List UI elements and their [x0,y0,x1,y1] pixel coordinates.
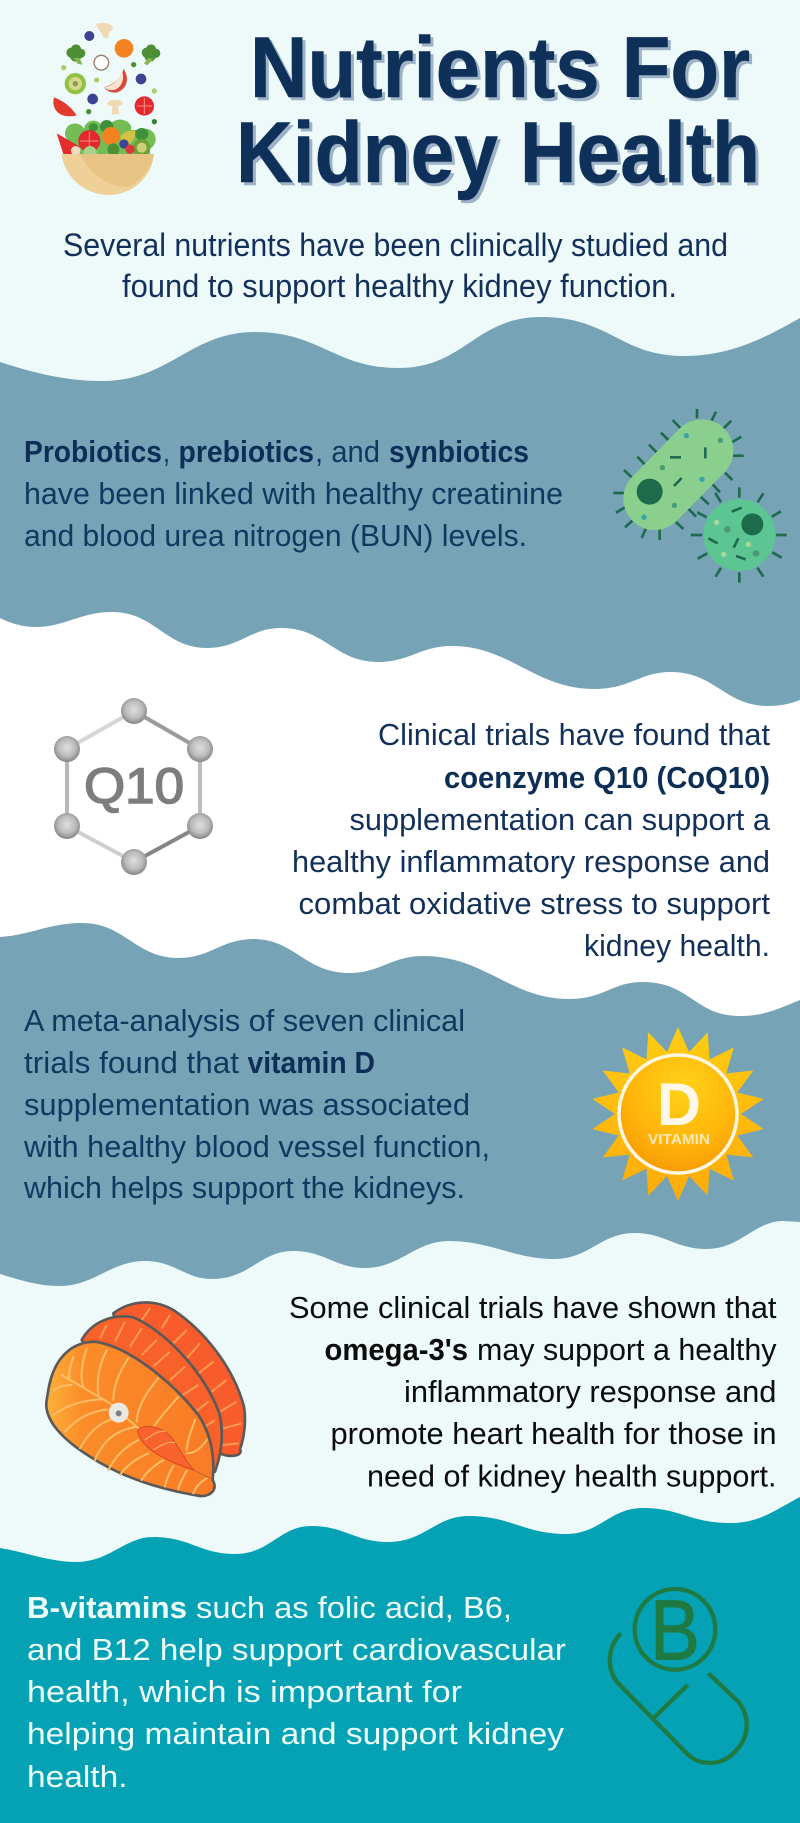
bonds [67,711,200,862]
middle slice [82,1316,222,1472]
icon: salad bowl with falling vegetables [53,23,160,195]
panel: omega-3 pale band [0,1221,800,1823]
broccoli right [142,44,160,65]
text block: vitamin D: A meta-analysis of seven clinical [24,1003,465,1038]
text block: B-vitamins: helping maintain and support kidney [27,1716,565,1751]
text block: omega-3: inflammatory response and [404,1374,776,1409]
mushroom top [96,23,113,38]
apple wedge [104,69,127,93]
atoms [54,698,213,875]
text block: probiotics [24,434,563,553]
Q10 label: Q10 [84,758,184,814]
text block: probiotics: Probiotics [24,434,162,469]
text block: B-vitamins: such as folic acid, B6, [196,1590,512,1625]
B circle [635,1589,715,1670]
text block: omega-3: Some clinical trials have shown that [289,1290,777,1325]
text block: probiotics: , and [315,434,380,469]
title shadow: Nutrients For [253,23,753,119]
text block: B-vitamins: and B12 help support cardiovascular [27,1632,566,1667]
text block: B-vitamins: B-vitamins [27,1590,187,1625]
text block: coenzyme Q10: Clinical trials have found that [378,717,770,752]
text block: probiotics: prebiotics [178,434,314,469]
panel: B-vitamins teal band [0,1497,800,1823]
icon: bacteria [613,409,787,583]
text block: coenzyme Q10: combat oxidative stress to support [298,886,770,921]
intro text [63,227,728,304]
sun rays [592,1027,764,1201]
text block: B-vitamins: health. [27,1759,128,1794]
letter D: D [657,1071,701,1138]
icon: vitamin D sun [592,1027,764,1201]
text block: probiotics: , [163,434,170,469]
text block: omega-3: promote heart health for those in [330,1416,776,1451]
text block: coenzyme Q10 [292,717,771,963]
text block: vitamin D: supplementation was associated [24,1087,470,1122]
back slice [113,1302,245,1456]
icon: vitamin B capsule [610,1583,747,1763]
tomato wedge [53,97,77,116]
icon: Q10 molecule [54,698,213,875]
title text: Kidney Health [236,105,760,201]
title text [236,20,760,201]
intro text: Several nutrients have been clinically studied and [63,227,728,263]
text block: B-vitamins: health, which is important for [27,1674,462,1709]
text block: omega-3: may support a healthy [477,1332,777,1367]
title shadow: Kidney Health [239,108,763,204]
text block: omega-3 [289,1290,777,1494]
backbone [109,1403,129,1423]
text block: omega-3: omega-3's [324,1332,468,1367]
text block: coenzyme Q10: supplementation can support a [350,802,771,837]
belly fin [137,1426,193,1470]
text block: vitamin D: trials found that [24,1045,239,1080]
text block: vitamin D: with healthy blood vessel function, [23,1129,490,1164]
text block: coenzyme Q10: healthy inflammatory response and [292,844,770,879]
text block: vitamin D: vitamin D [248,1045,375,1080]
intro text: found to support healthy kidney function. [122,268,677,304]
title [236,20,763,204]
icon: salmon steaks [46,1302,245,1496]
salad greens [65,120,156,154]
capsule outline [610,1633,747,1763]
text block: coenzyme Q10: kidney health. [584,928,770,963]
title shadow [239,23,763,204]
panel: vitamin D wave band [0,923,800,1823]
text block: vitamin D: which helps support the kidneys. [23,1170,465,1205]
spikes [613,409,787,583]
text block: B-vitamins [27,1590,566,1794]
panel: CoQ10 white band [0,612,800,1823]
broccoli left [66,44,85,65]
letter B: B [650,1583,700,1678]
front slice [46,1342,215,1496]
text block: coenzyme Q10: coenzyme Q10 (CoQ10) [444,760,770,795]
label VITAMIN: VITAMIN [648,1131,710,1148]
text block: vitamin D [23,1003,490,1205]
sun disc [619,1055,737,1173]
text block: probiotics: synbiotics [389,434,529,469]
watermelon wedge [57,133,80,158]
text block: probiotics: have been linked with healthy creatinine [24,476,563,511]
bowl [62,154,154,195]
mushroom middle [107,100,123,115]
text block: omega-3: need of kidney health support. [367,1458,776,1494]
text block: probiotics: and blood urea nitrogen (BUN) levels. [24,518,527,553]
title text: Nutrients For [250,20,750,116]
